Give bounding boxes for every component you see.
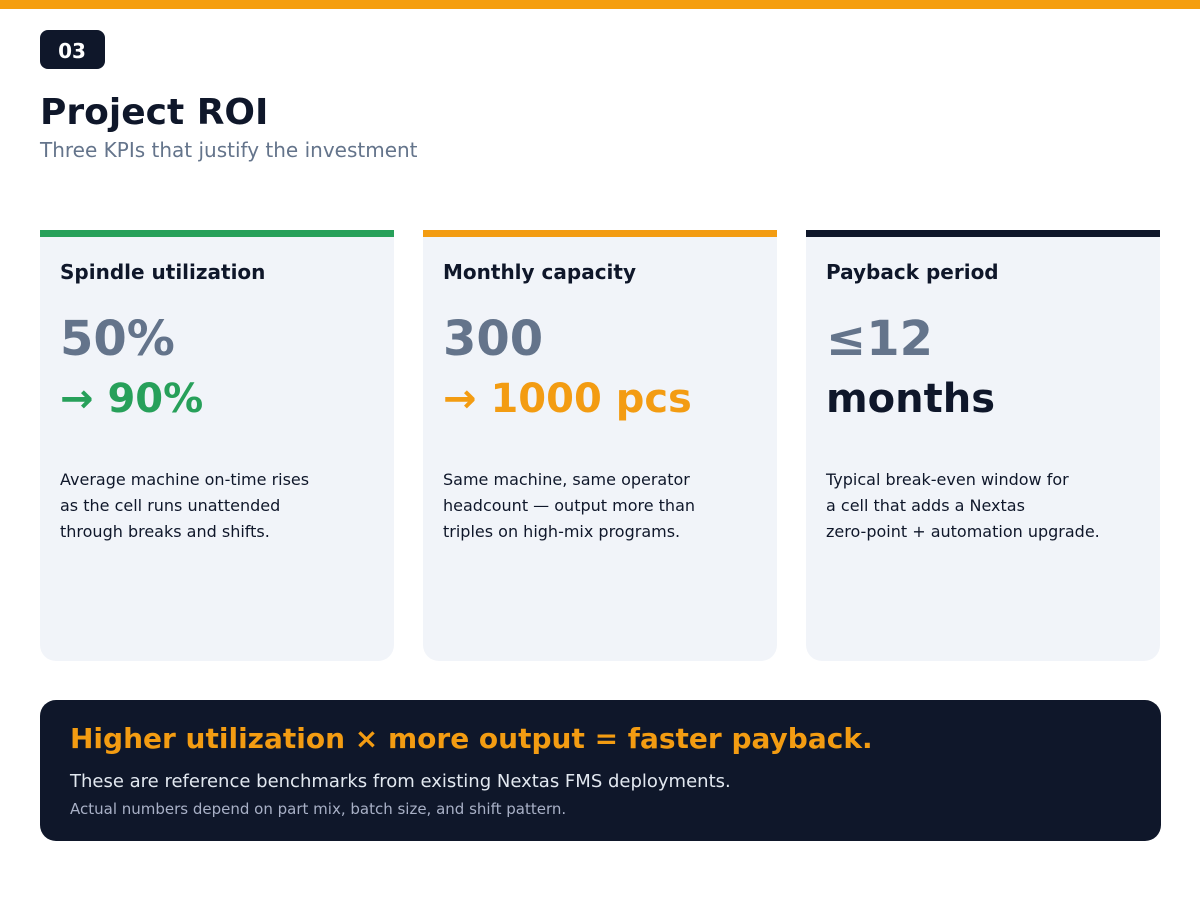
description: capacity bbox=[443, 470, 695, 541]
section number badge: 03 bbox=[58, 39, 86, 63]
callout: summary banner bbox=[40, 700, 1161, 841]
description: payback: zero-point + automation upgrade. bbox=[826, 522, 1100, 541]
value: 12 or less: ≤12 bbox=[826, 311, 933, 367]
description: utilization: Average machine on-time rises bbox=[60, 470, 309, 489]
after value: 1000 pcs: → 1000 pcs bbox=[443, 376, 692, 422]
value unit: months: months bbox=[826, 376, 995, 422]
description: utilization: through breaks and shifts. bbox=[60, 522, 270, 541]
description: capacity: headcount — output more than bbox=[443, 496, 695, 515]
panel: payback period bbox=[806, 230, 1160, 661]
description: capacity: triples on high-mix programs. bbox=[443, 522, 680, 541]
callout headline: Higher utilization × more output = faster payback. bbox=[70, 722, 873, 755]
description: payback bbox=[826, 470, 1100, 541]
card heading: payback period: Payback period bbox=[826, 260, 999, 284]
description: payback: a cell that adds a Nextas bbox=[826, 496, 1025, 515]
after value: 90%: → 90% bbox=[60, 376, 203, 422]
panel: spindle utilization bbox=[40, 230, 394, 661]
section number badge bbox=[40, 30, 105, 69]
before value: 50%: 50% bbox=[60, 311, 175, 367]
description: capacity: Same machine, same operator bbox=[443, 470, 690, 489]
description: payback: Typical break-even window for bbox=[826, 470, 1069, 489]
title: Project ROI bbox=[40, 92, 268, 133]
callout note: Actual numbers depend on part mix, batch size, and shift pattern. bbox=[70, 800, 566, 818]
card heading: spindle utilization: Spindle utilization bbox=[60, 260, 265, 284]
description: utilization: as the cell runs unattended bbox=[60, 496, 280, 515]
panel: monthly capacity bbox=[423, 230, 777, 661]
description: utilization bbox=[60, 470, 309, 541]
card heading: monthly capacity: Monthly capacity bbox=[443, 260, 636, 284]
before value: 300: 300 bbox=[443, 311, 543, 367]
subtitle: Three KPIs that justify the investment bbox=[40, 138, 418, 162]
callout body: These are reference benchmarks from existing Nextas FMS deployments. bbox=[70, 771, 731, 792]
top accent bar bbox=[0, 0, 1200, 9]
